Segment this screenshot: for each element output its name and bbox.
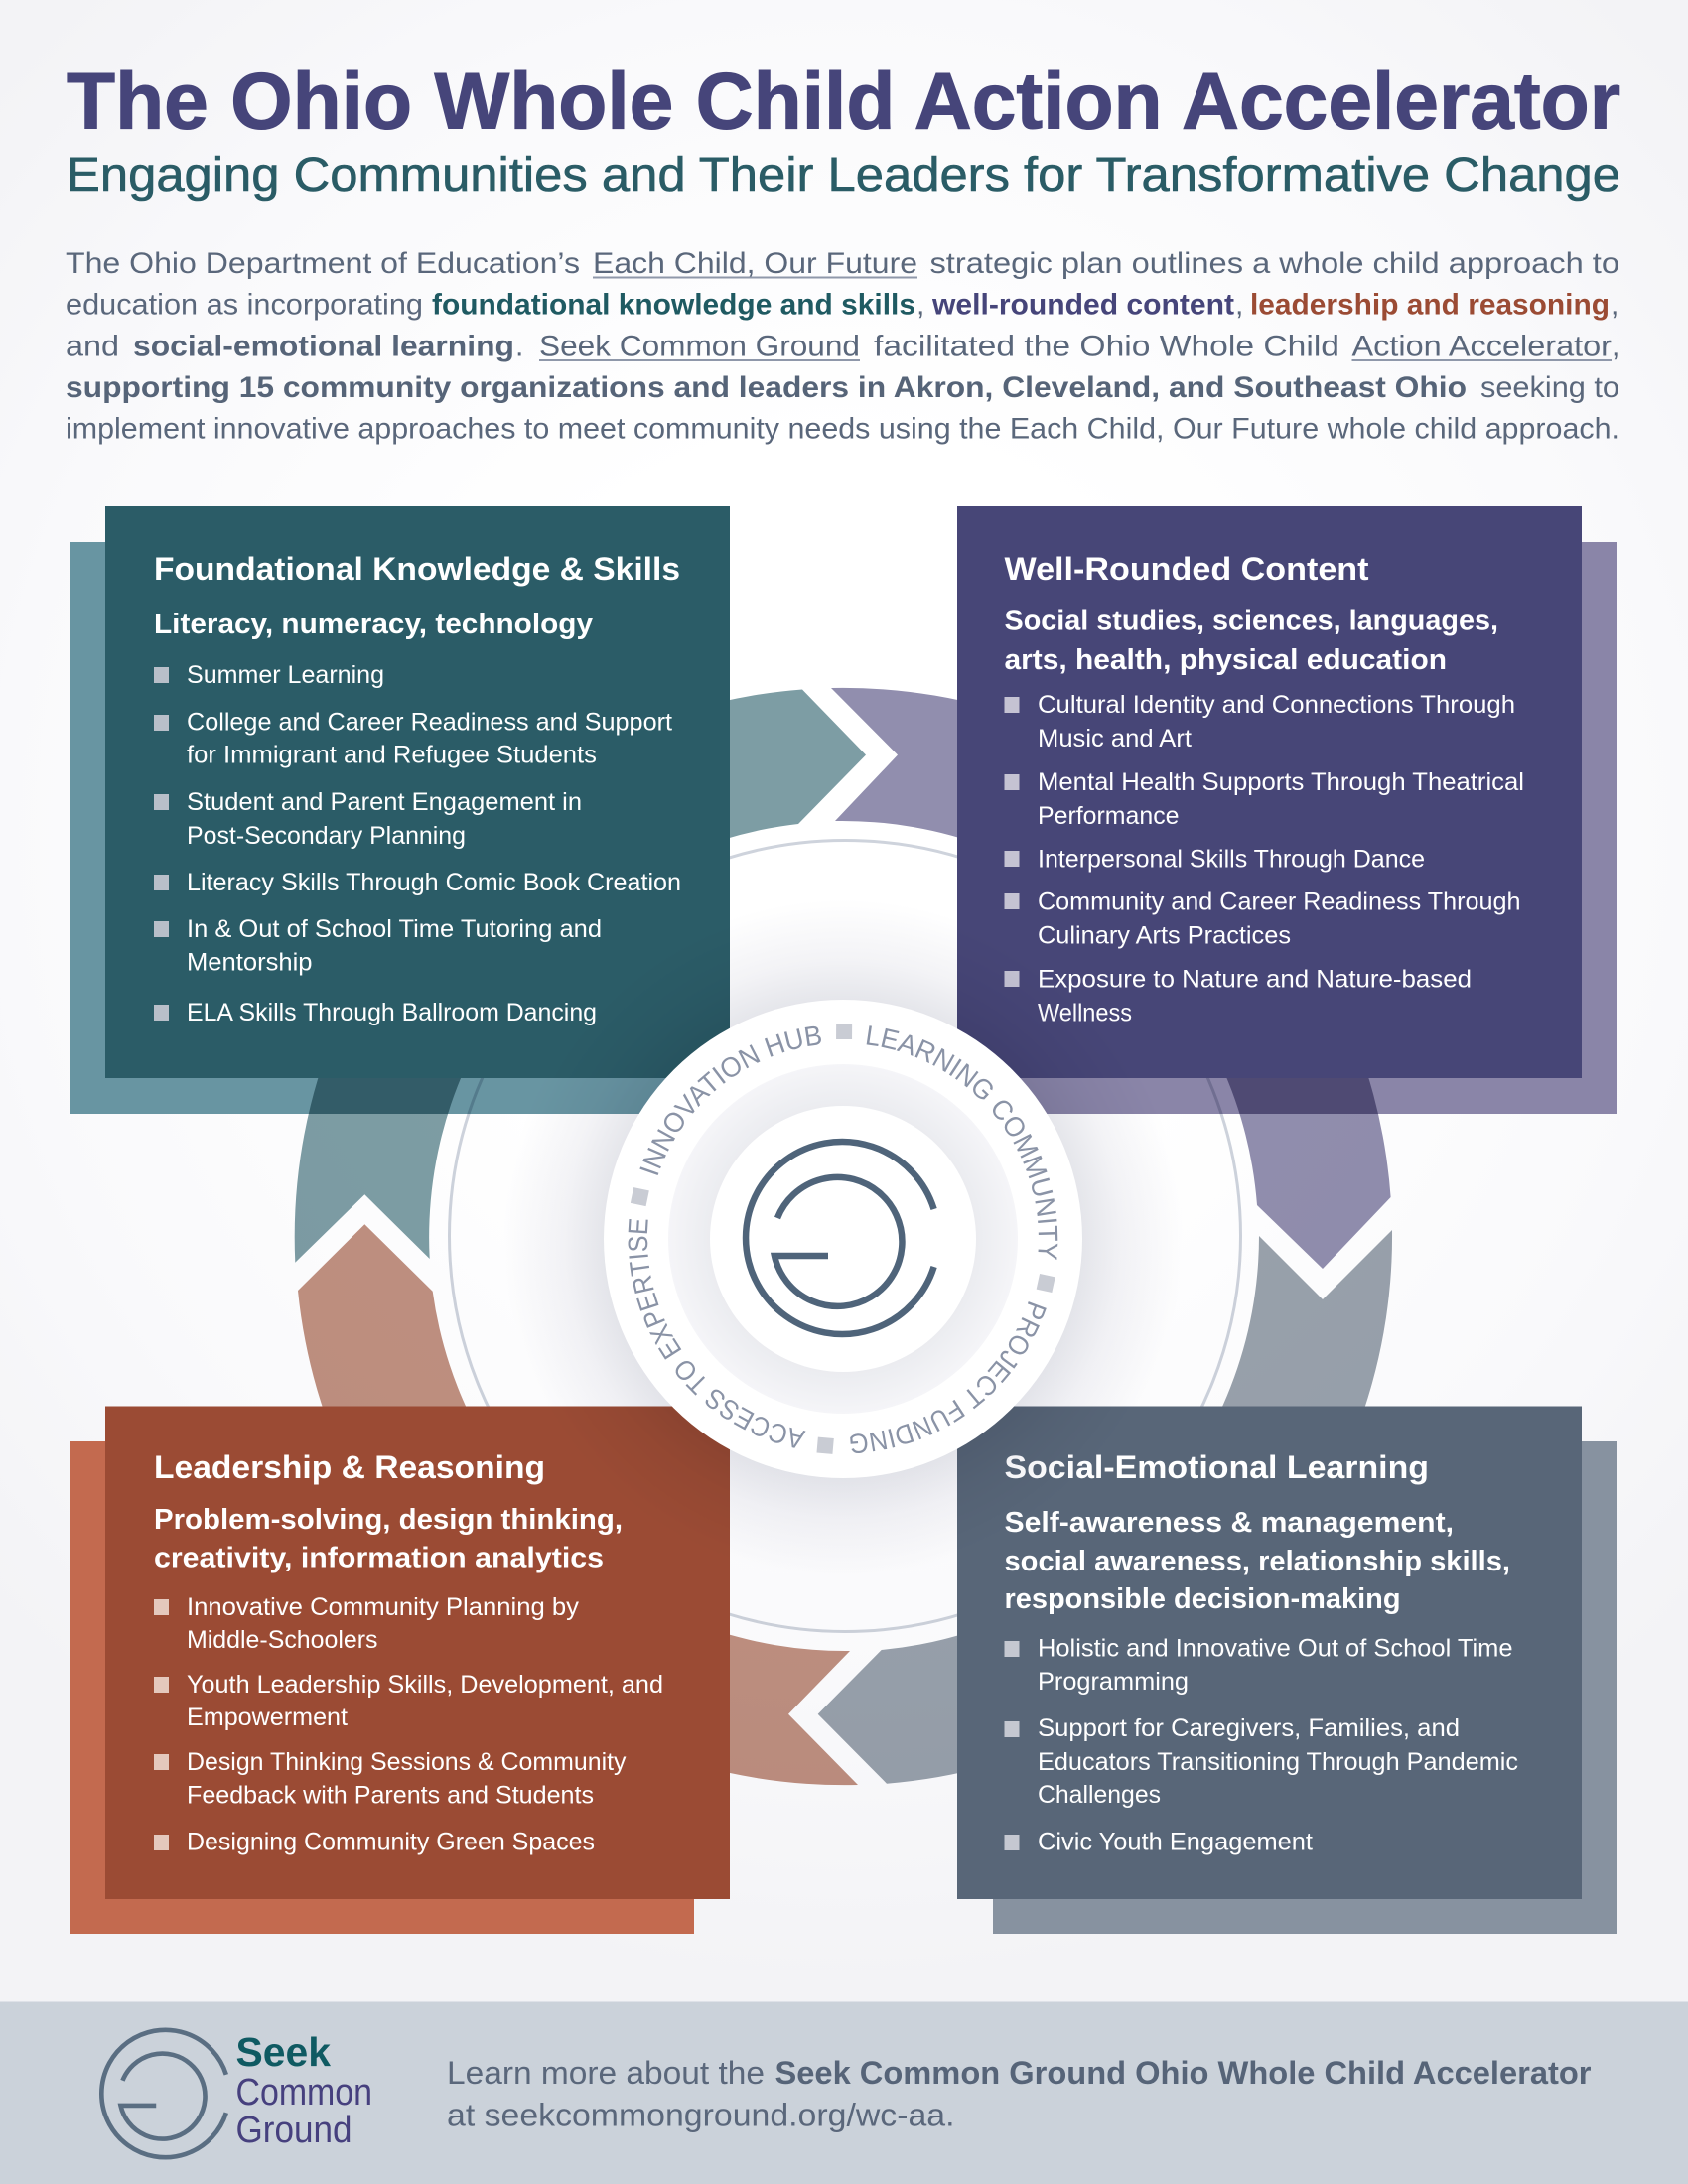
arrow: purple xyxy=(831,688,1391,1269)
list: Designing Community Green Spaces xyxy=(187,1829,595,1856)
subheading: Social studies, sciences, languages, xyxy=(1005,606,1498,637)
list: Youth Leadership Skills, Development, and xyxy=(187,1671,663,1699)
list xyxy=(1005,691,1524,1026)
list: for Immigrant and Refugee Students xyxy=(187,741,597,768)
heading: Leadership & Reasoning xyxy=(154,1449,545,1485)
icon: hub logo xyxy=(746,1142,934,1334)
list: Middle-Schoolers xyxy=(187,1626,377,1654)
heading: Social-Emotional Learning xyxy=(1005,1449,1429,1485)
intro paragraph: . xyxy=(515,330,523,363)
footer call to action: Seek Common Ground Ohio Whole Child Accelerator xyxy=(774,2055,1591,2091)
ring text: learning community: LEARNING COMMUNITY xyxy=(866,1025,1058,1260)
subheading: creativity, information analytics xyxy=(154,1543,604,1574)
list: Wellness xyxy=(1038,999,1132,1026)
intro paragraph: well-rounded content xyxy=(931,288,1234,322)
list: Post-Secondary Planning xyxy=(187,822,466,850)
intro paragraph: , xyxy=(1235,288,1243,322)
panel: well-rounded content xyxy=(957,506,1582,1078)
cycle arrows xyxy=(295,688,1392,1785)
panel: foundational knowledge and skills xyxy=(105,506,730,1078)
list: Mental Health Supports Through Theatrical xyxy=(1038,768,1524,796)
intro paragraph xyxy=(66,247,1619,445)
subheading xyxy=(1005,1507,1510,1615)
ring text: project funding: PROJECT FUNDING xyxy=(850,1301,1047,1453)
list: Educators Transitioning Through Pandemic xyxy=(1038,1748,1518,1776)
logo wordmark: Common xyxy=(236,2072,372,2114)
list: Design Thinking Sessions & Community xyxy=(187,1748,627,1776)
logo wordmark xyxy=(236,2029,372,2151)
intro paragraph: , xyxy=(1612,330,1619,363)
list: Performance xyxy=(1038,802,1180,830)
list: Empowerment xyxy=(187,1704,348,1731)
list: In & Out of School Time Tutoring and xyxy=(187,915,602,943)
arrow: salmon xyxy=(298,1224,858,1785)
panel: leadership and reasoning xyxy=(105,1406,730,1899)
list: ELA Skills Through Ballroom Dancing xyxy=(187,999,597,1026)
list: Summer Learning xyxy=(187,661,384,689)
intro paragraph: , xyxy=(1611,288,1618,322)
arrow: slate xyxy=(818,1230,1392,1784)
intro paragraph: Seek Common Ground xyxy=(539,330,860,363)
offset panel: social-emotional xyxy=(993,1441,1617,1934)
intro paragraph: supporting 15 community organizations and leaders in Akron, Cleveland, and Southeast Ohio xyxy=(66,371,1467,404)
list: Music and Art xyxy=(1038,725,1192,752)
intro paragraph: leadership and reasoning xyxy=(1250,288,1610,322)
list: Exposure to Nature and Nature-based xyxy=(1038,965,1472,993)
footer call to action: at seekcommonground.org/wc-aa. xyxy=(447,2097,955,2132)
intro paragraph: , xyxy=(916,288,924,322)
subheading: arts, health, physical education xyxy=(1005,644,1447,676)
central hub xyxy=(604,1000,1082,1478)
intro paragraph: foundational knowledge and skills xyxy=(432,288,915,322)
thin ring xyxy=(449,840,1241,1632)
subheading: social awareness, relationship skills, xyxy=(1005,1546,1510,1577)
list: Programming xyxy=(1038,1668,1189,1696)
list: Mentorship xyxy=(187,949,312,977)
list: Student and Parent Engagement in xyxy=(187,788,582,816)
subheading xyxy=(154,1504,623,1574)
subheading: Literacy, numeracy, technology xyxy=(154,609,593,640)
ring text: access to expertise: ACCESS TO EXPERTISE xyxy=(628,1219,806,1448)
intro paragraph: social-emotional learning xyxy=(133,330,514,363)
list: Interpersonal Skills Through Dance xyxy=(1038,846,1425,874)
ring separators xyxy=(631,1024,1055,1454)
offset panel: foundational xyxy=(70,542,694,1114)
central hub shadow xyxy=(486,882,1200,1596)
offset panel: well-rounded xyxy=(993,542,1617,1114)
footer call to action: Learn more about the xyxy=(447,2055,765,2091)
heading: Well-Rounded Content xyxy=(1005,551,1369,587)
intro paragraph: seeking to xyxy=(1480,371,1619,404)
footer band xyxy=(0,2001,1688,2184)
ring text: innovation hub: INNOVATION HUB xyxy=(639,1026,821,1175)
offset panel: leadership xyxy=(70,1441,694,1934)
intro paragraph: Action Accelerator xyxy=(1352,330,1612,363)
list xyxy=(1005,1634,1518,1856)
list: Literacy Skills Through Comic Book Creation xyxy=(187,869,681,896)
subheading: Problem-solving, design thinking, xyxy=(154,1504,623,1536)
footer call to action xyxy=(447,2055,1591,2132)
list: Culinary Arts Practices xyxy=(1038,921,1291,949)
intro paragraph: strategic plan outlines a whole child approach to xyxy=(929,247,1619,280)
subtitle: Engaging Communities and Their Leaders for Transformative Change xyxy=(67,149,1620,202)
intro paragraph: The Ohio Department of Education’s xyxy=(66,247,580,280)
list xyxy=(154,661,681,1026)
list: Innovative Community Planning by xyxy=(187,1593,579,1621)
subheading: Self-awareness & management, xyxy=(1005,1507,1454,1539)
heading: Foundational Knowledge & Skills xyxy=(154,551,680,587)
subheading xyxy=(1005,606,1498,676)
intro paragraph: Each Child, Our Future xyxy=(593,247,917,280)
logo wordmark: Seek xyxy=(236,2029,331,2075)
list: Community and Career Readiness Through xyxy=(1038,887,1521,915)
list xyxy=(154,1593,663,1856)
list: Cultural Identity and Connections Through xyxy=(1038,691,1515,719)
panel: social-emotional learning xyxy=(957,1406,1582,1899)
intro paragraph: and xyxy=(66,330,119,363)
logo wordmark: Ground xyxy=(236,2110,352,2151)
arrow: teal xyxy=(295,689,866,1263)
subheading: responsible decision-making xyxy=(1005,1583,1400,1615)
list: College and Career Readiness and Support xyxy=(187,709,672,737)
list: Support for Caregivers, Families, and xyxy=(1038,1714,1460,1742)
intro paragraph: facilitated the Ohio Whole Child xyxy=(874,330,1339,363)
list: Holistic and Innovative Out of School Time xyxy=(1038,1634,1513,1662)
intro paragraph: education as incorporating xyxy=(66,288,423,322)
list: Civic Youth Engagement xyxy=(1038,1829,1313,1856)
intro paragraph: implement innovative approaches to meet community needs using the Each Child, Our Future whole child approach. xyxy=(66,413,1619,445)
title: The Ohio Whole Child Action Accelerator xyxy=(67,58,1620,147)
list: Challenges xyxy=(1038,1781,1161,1809)
icon: footer logo xyxy=(101,2030,226,2157)
list: Feedback with Parents and Students xyxy=(187,1781,594,1809)
